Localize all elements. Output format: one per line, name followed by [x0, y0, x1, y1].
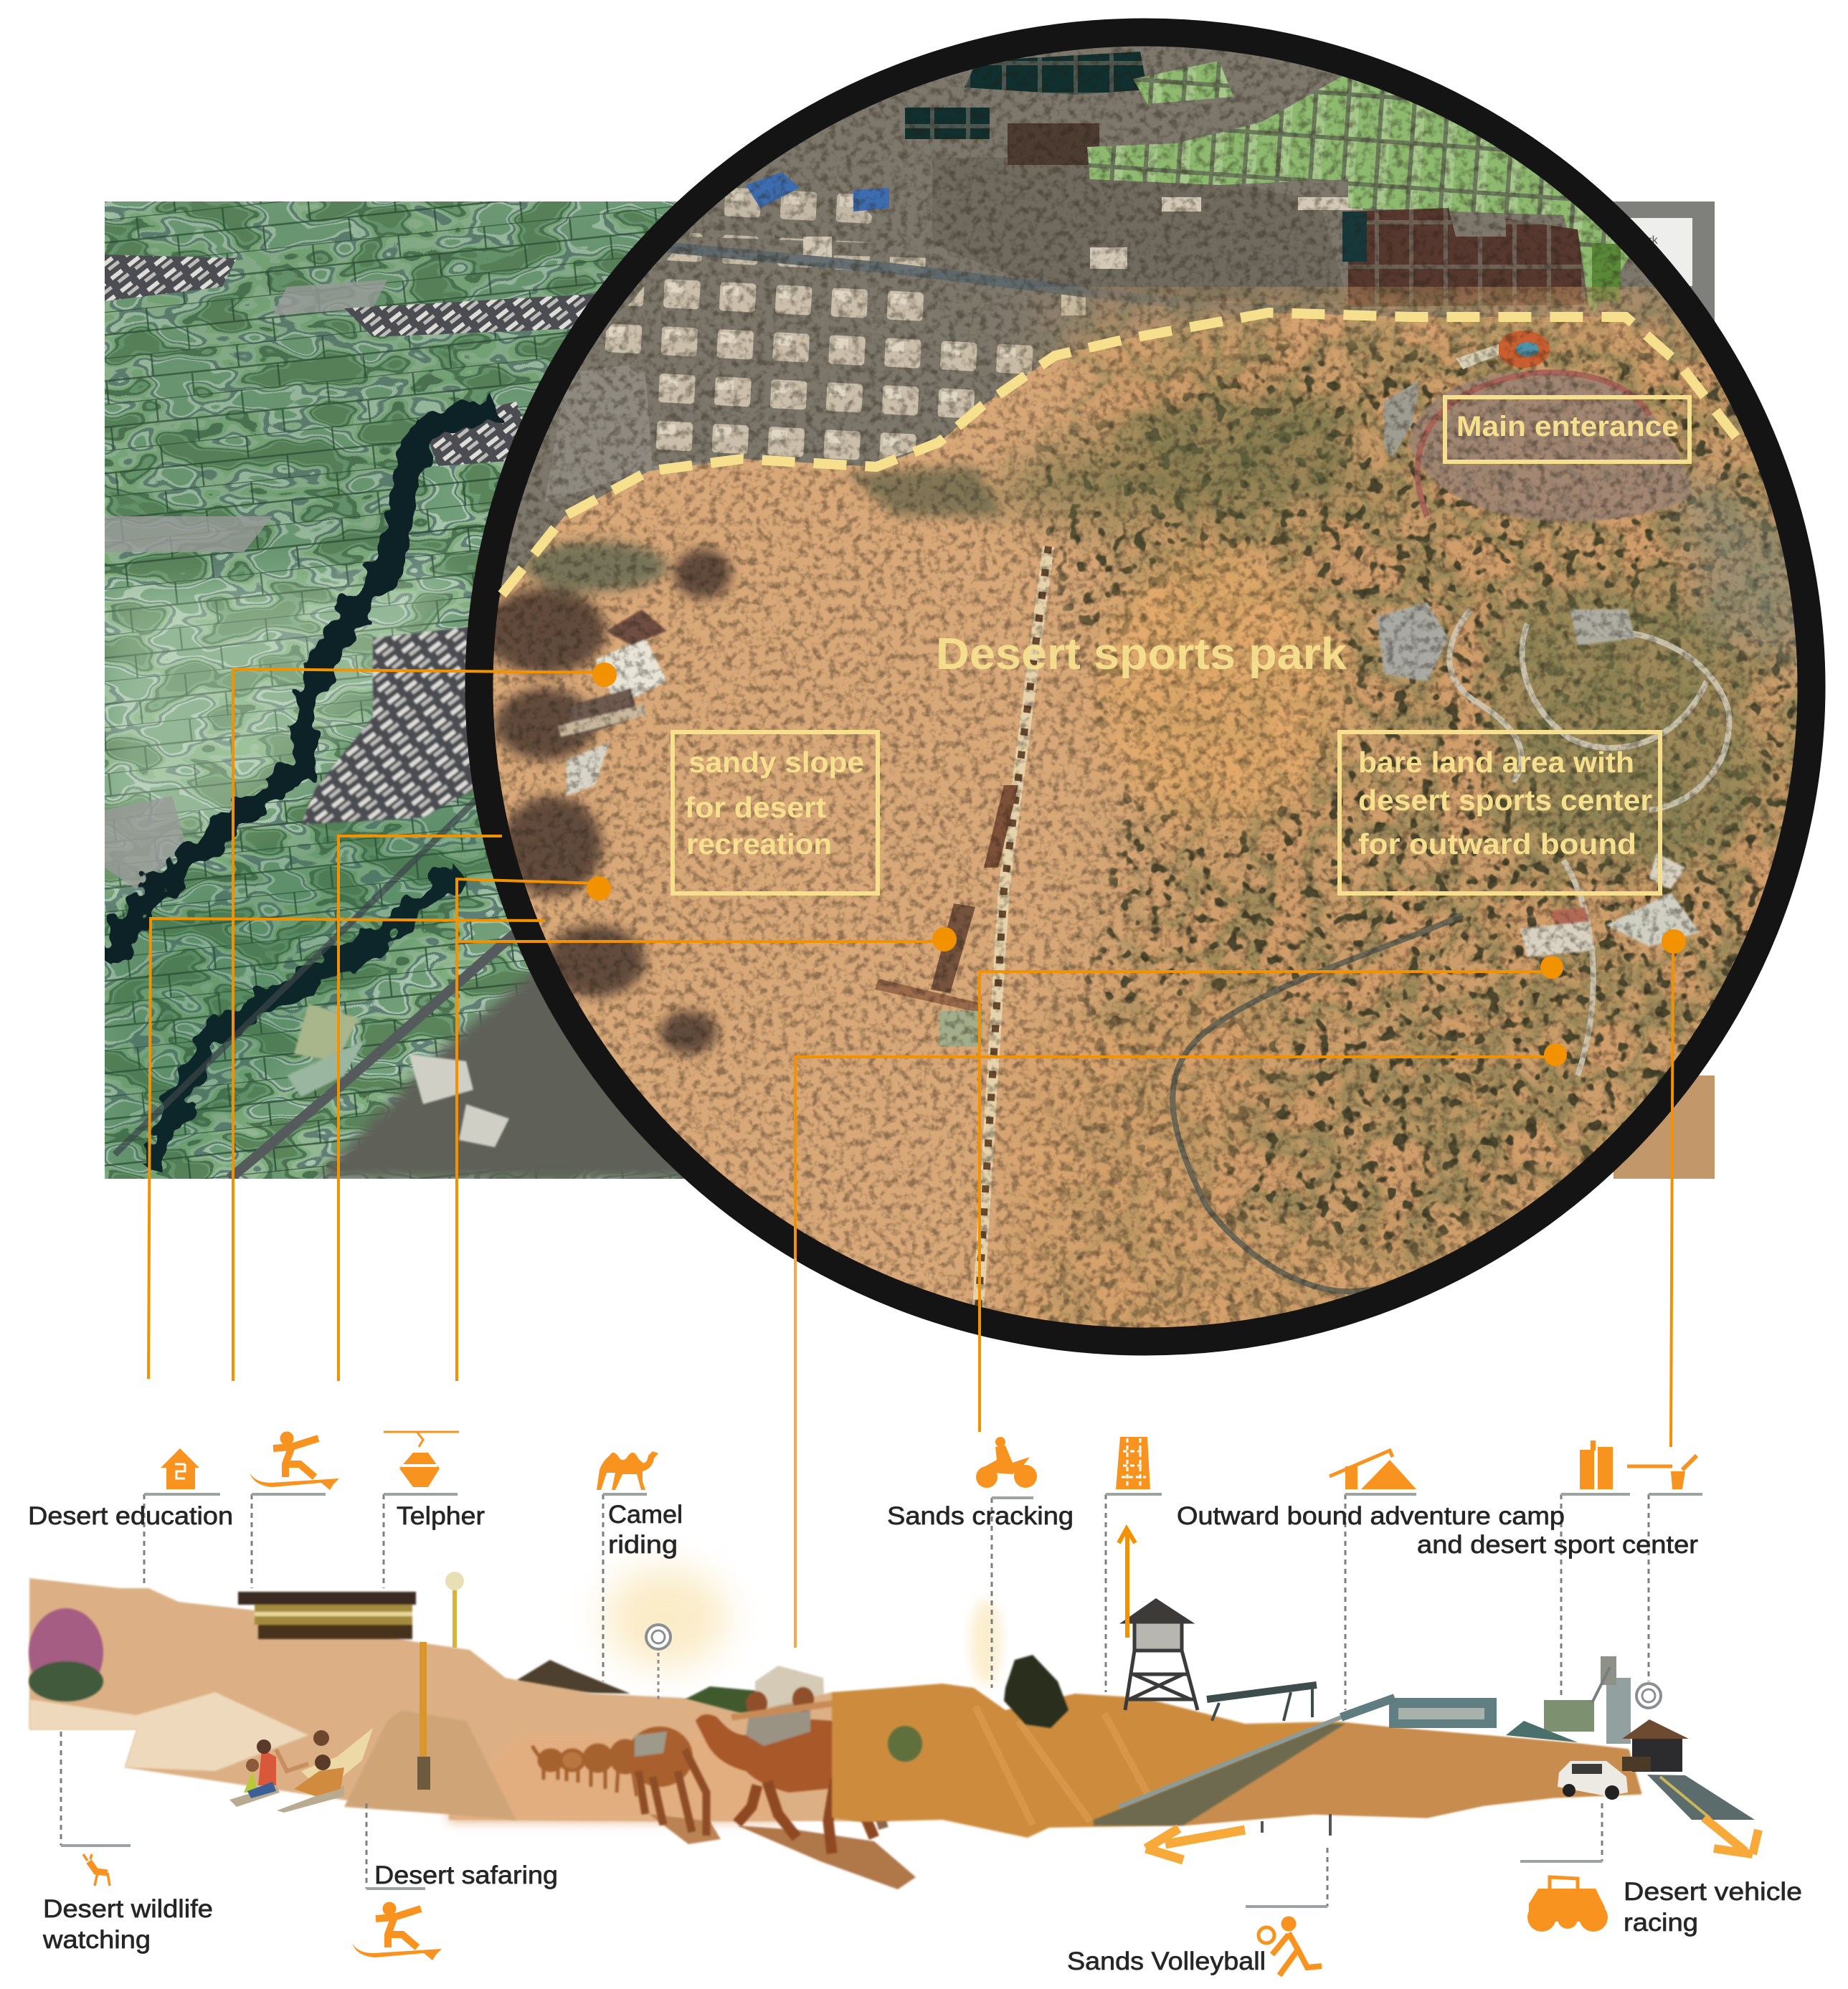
- icon: volleyball player: [1259, 1916, 1322, 1975]
- ploughed plot: [1008, 123, 1099, 165]
- dark tree band: [846, 466, 1004, 516]
- camp buildings: [1520, 853, 1700, 957]
- text labels: Sands Volleyball: [1067, 1947, 1266, 1975]
- label box: sandy slope: [673, 732, 878, 893]
- farmland texture: [105, 201, 684, 1179]
- label box: bare land: bare land area with: [1358, 746, 1634, 779]
- winding road: [1172, 915, 1463, 1291]
- land: sand base: [459, 313, 1836, 1362]
- text labels: [28, 1501, 1802, 1975]
- large camel: [696, 1687, 883, 1853]
- leader caps: [61, 1494, 1702, 1907]
- tall grey tower: [1592, 1656, 1631, 1744]
- label box: bare land: [1340, 732, 1660, 893]
- pool building: [1456, 331, 1550, 369]
- road: [1647, 1775, 1755, 1820]
- icon: silo: [1580, 1440, 1613, 1489]
- icon: racing truck: [1527, 1877, 1608, 1932]
- text labels: watching: [42, 1926, 151, 1954]
- rocky area: [316, 961, 932, 1179]
- icon: deer: [83, 1854, 110, 1886]
- white inset tag: 4: [1657, 254, 1667, 275]
- village cluster: [300, 625, 473, 826]
- entrance plaza: [1409, 371, 1692, 522]
- panel: magnified circle of the park: [459, 22, 1836, 1362]
- text labels: Desert education: [28, 1502, 233, 1530]
- village plots north: [688, 172, 896, 244]
- grey hillside east: [1671, 459, 1821, 674]
- road 2: [115, 774, 502, 1154]
- second camel: [627, 1727, 706, 1836]
- leader lines: [61, 1494, 1649, 1907]
- villa building 2: [1570, 609, 1635, 645]
- panel: section landscape: [29, 1529, 1758, 1889]
- dark ponds: [965, 52, 1147, 95]
- white inset tag: [1603, 218, 1692, 286]
- scrub pattern: [932, 287, 1836, 1362]
- green boulder: [1004, 1655, 1068, 1728]
- white inset tag: s park: [1626, 234, 1659, 247]
- purple shrub: [29, 1608, 103, 1701]
- text labels: riding: [608, 1531, 678, 1559]
- label box: sandy slope: for desert: [685, 791, 826, 824]
- bottom-right corner: [1614, 1076, 1715, 1179]
- park paths: [1449, 609, 1729, 1076]
- title: Desert sports park: Desert sports park: [936, 630, 1347, 679]
- family on sand sleds: [229, 1728, 373, 1813]
- west compound: [559, 609, 667, 796]
- dashed park boundary: [502, 313, 1737, 594]
- label box: bare land: for outward bound: [1358, 827, 1636, 860]
- dune bush: [888, 1726, 922, 1762]
- text labels: and desert sport center: [1417, 1531, 1698, 1559]
- icon: crane: [1627, 1456, 1697, 1489]
- green ridge: [975, 402, 1363, 523]
- beige building: [755, 1666, 825, 1710]
- icon: sand surfer: [250, 1431, 339, 1490]
- lower gully: [149, 871, 459, 1165]
- dark hill: [517, 1660, 630, 1694]
- label box: main entrance: Main enterance: [1456, 411, 1679, 442]
- pale sand foreground: [29, 1692, 308, 1771]
- green factory box: [1544, 1700, 1594, 1732]
- grey plots: [545, 344, 803, 502]
- icon: camel: [597, 1451, 658, 1490]
- lamp pole: [445, 1572, 464, 1648]
- surface grain: [459, 22, 1836, 1362]
- second camel shadow: [649, 1814, 721, 1844]
- watch tower: [1125, 1600, 1198, 1710]
- river gully: [105, 405, 495, 961]
- ring of the circle: [479, 32, 1811, 1342]
- villa building: [1377, 602, 1449, 681]
- east dune tone: [1183, 1724, 1641, 1826]
- orange up arrow: [1119, 1529, 1135, 1638]
- target marker east: [1636, 1684, 1661, 1708]
- icon: tent: [1330, 1451, 1416, 1489]
- yellow haze: [605, 1567, 726, 1668]
- cable pole: [420, 1642, 427, 1778]
- walkway rail: [1119, 1717, 1341, 1807]
- icon: watch tower: [1116, 1437, 1150, 1489]
- label box: bare land: desert sports center: [1358, 784, 1652, 817]
- brown plots: [1348, 208, 1588, 307]
- text labels: Outward bound adventure camp: [1177, 1502, 1565, 1530]
- haze 2: [970, 1599, 1002, 1685]
- text labels: racing: [1624, 1909, 1698, 1937]
- green hill: [1499, 595, 1764, 868]
- road: [229, 932, 516, 1179]
- green trees: [678, 1686, 757, 1715]
- top-right map corner: [1592, 201, 1715, 560]
- green fields: [1087, 65, 1642, 315]
- west sand dune: [29, 1578, 889, 1821]
- main road: [667, 247, 1635, 324]
- conveyor: [1207, 1685, 1317, 1721]
- farmland and village base: [459, 22, 1836, 667]
- panel: base satellite map: [105, 201, 1715, 1179]
- village plots: [595, 251, 1061, 466]
- text labels: Camel: [608, 1501, 683, 1529]
- large camel shadow: [737, 1826, 916, 1889]
- label box: main entrance: [1445, 397, 1690, 462]
- restaurant building: [238, 1592, 416, 1639]
- west trees: [484, 541, 731, 1054]
- dune highlights: [975, 1706, 1155, 1825]
- icon: telpher cabin: [384, 1432, 459, 1487]
- small camels: [532, 1741, 640, 1796]
- slide tracks: [875, 785, 1018, 1047]
- slope walkway: [1094, 1724, 1345, 1826]
- green fields north: [1133, 61, 1233, 104]
- bottom warm sand: [1004, 989, 1649, 1362]
- target marker west: [646, 1625, 671, 1699]
- icon: sand surfer (safaring): [352, 1902, 442, 1960]
- blue sheds: [746, 172, 889, 212]
- blue gray plant: [1341, 1698, 1497, 1728]
- mud terrain: [932, 158, 1348, 301]
- vegetated terrain: [932, 287, 1836, 1362]
- location dots: [587, 663, 1686, 1066]
- pale plots: [803, 197, 1441, 315]
- text labels: Desert vehicle: [1624, 1878, 1802, 1906]
- pink sand: [449, 1735, 789, 1821]
- orange connector lines: [148, 669, 1673, 1648]
- dotted tree line: [978, 546, 1048, 1309]
- cable base: [417, 1757, 430, 1790]
- text labels: Sands cracking: [887, 1502, 1074, 1530]
- grey plots: [105, 280, 387, 889]
- label box: sandy slope: recreation: [686, 827, 832, 860]
- dark pond 2: [905, 108, 990, 139]
- hut: [1622, 1719, 1689, 1772]
- icon: quad bike: [976, 1437, 1037, 1488]
- SUV: [1558, 1761, 1628, 1800]
- bright field: [1592, 244, 1621, 301]
- tracked slope: [344, 1710, 516, 1820]
- small posts: [1262, 1814, 1330, 1836]
- text labels: Telpher: [397, 1502, 485, 1530]
- teal pond: [1342, 212, 1367, 262]
- text labels: Desert safaring: [374, 1861, 558, 1889]
- plaza ring: [1418, 372, 1649, 516]
- road line: [1660, 1777, 1710, 1818]
- orange arrow east: [1704, 1818, 1758, 1854]
- text labels: Desert wildlife: [43, 1895, 213, 1923]
- low machinery: [1506, 1721, 1578, 1742]
- village strip: [105, 255, 595, 337]
- orange dune: [832, 1684, 1641, 1838]
- grey wing: [1384, 380, 1420, 459]
- label box: sandy slope: sandy slope: [688, 746, 864, 779]
- icon: education house: [161, 1448, 199, 1489]
- pale rocks: [287, 1004, 509, 1147]
- orange arrow west: [1146, 1828, 1245, 1860]
- bright sand glow: [1097, 552, 1341, 825]
